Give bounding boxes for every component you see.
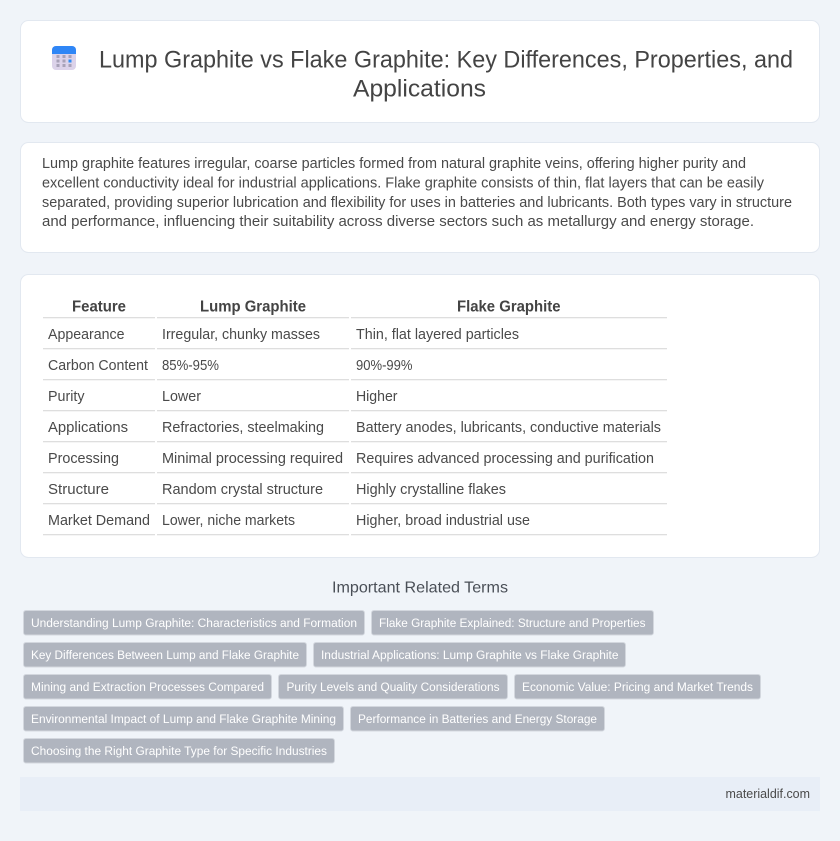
row: structure: Random crystal structure xyxy=(162,482,323,498)
tag xyxy=(24,738,334,763)
footer xyxy=(20,777,820,811)
tag xyxy=(514,674,760,699)
row: appearance: Thin, flat layered particles xyxy=(356,327,519,343)
row: applications xyxy=(43,420,667,442)
row: structure: Structure xyxy=(48,482,109,498)
row: carbon content: Carbon Content xyxy=(48,358,148,374)
title: Applications xyxy=(353,76,486,102)
tag: Environmental Impact of Lump and Flake Graphite Mining xyxy=(31,712,336,726)
text block: introduction: separated, providing superior lubrication and flexibility for uses in batteries and lubricants. Both types vary in structure xyxy=(42,195,792,211)
text block: introduction xyxy=(42,156,792,230)
row: structure xyxy=(43,482,667,504)
row: appearance: Appearance xyxy=(48,327,124,343)
panel: header xyxy=(20,20,820,122)
row: carbon content: 90%-99% xyxy=(356,358,413,374)
row: structure: Highly crystalline flakes xyxy=(356,482,506,498)
icon: calendar xyxy=(52,46,76,70)
row: purity: Purity xyxy=(48,389,85,405)
row: carbon content: 85%-95% xyxy=(162,358,219,374)
tag: Choosing the Right Graphite Type for Specific Industries xyxy=(31,744,327,758)
panel: comparison table xyxy=(20,274,820,558)
tag: Economic Value: Pricing and Market Trends xyxy=(522,680,753,694)
row: purity: Lower xyxy=(162,389,201,405)
tag: Performance in Batteries and Energy Storage xyxy=(358,712,597,726)
tag: Industrial Applications: Lump Graphite vs Flake Graphite xyxy=(321,648,619,662)
table header xyxy=(43,298,667,318)
text block: introduction: Lump graphite features irregular, coarse particles formed from natural graphite veins, offering higher purity and xyxy=(42,156,746,172)
related term tags xyxy=(24,610,760,763)
tag: Mining and Extraction Processes Compared xyxy=(31,680,264,694)
footer source text: materialdif.com xyxy=(726,787,810,801)
text block: introduction: and performance, influencing their suitability across diverse sectors such as metallurgy and energy storage. xyxy=(42,214,754,230)
row: processing: Processing xyxy=(48,451,119,467)
row: processing: Requires advanced processing and purification xyxy=(356,451,654,467)
tag xyxy=(24,706,344,731)
row: applications: Battery anodes, lubricants, conductive materials xyxy=(356,420,661,436)
row: appearance: Irregular, chunky masses xyxy=(162,327,320,343)
heading: related terms: Important Related Terms xyxy=(332,580,508,596)
panel: introduction xyxy=(20,142,820,252)
table header: Feature xyxy=(72,298,126,316)
tag: Purity Levels and Quality Considerations xyxy=(286,680,500,694)
title xyxy=(99,46,793,102)
row: market demand: Higher, broad industrial use xyxy=(356,513,530,529)
title: Lump Graphite vs Flake Graphite: Key Differences, Properties, and xyxy=(99,46,793,74)
text block: introduction: excellent conductivity ideal for industrial applications. Flake graphite consists of thin, flat layers that can be easily xyxy=(42,176,765,192)
row: applications: Applications xyxy=(48,420,128,436)
tag xyxy=(24,610,364,635)
row: processing: Minimal processing required xyxy=(162,451,343,467)
tag xyxy=(24,674,272,699)
row: purity xyxy=(43,389,667,411)
row: market demand xyxy=(43,513,667,535)
row: processing xyxy=(43,451,667,473)
row: carbon content xyxy=(43,358,667,380)
tag: Key Differences Between Lump and Flake Graphite xyxy=(31,648,299,662)
table header: Flake Graphite xyxy=(457,298,561,316)
table header: Lump Graphite xyxy=(200,298,306,316)
row: market demand: Lower, niche markets xyxy=(162,513,295,529)
tag xyxy=(24,642,306,667)
row: appearance xyxy=(43,327,667,349)
tag: Flake Graphite Explained: Structure and Properties xyxy=(379,616,646,630)
tag xyxy=(314,642,626,667)
tag xyxy=(278,674,508,699)
row: applications: Refractories, steelmaking xyxy=(162,420,324,436)
tag: Understanding Lump Graphite: Characteristics and Formation xyxy=(31,616,357,630)
tag xyxy=(372,610,654,635)
row: market demand: Market Demand xyxy=(48,513,150,529)
row: purity: Higher xyxy=(356,389,398,405)
tag xyxy=(350,706,604,731)
